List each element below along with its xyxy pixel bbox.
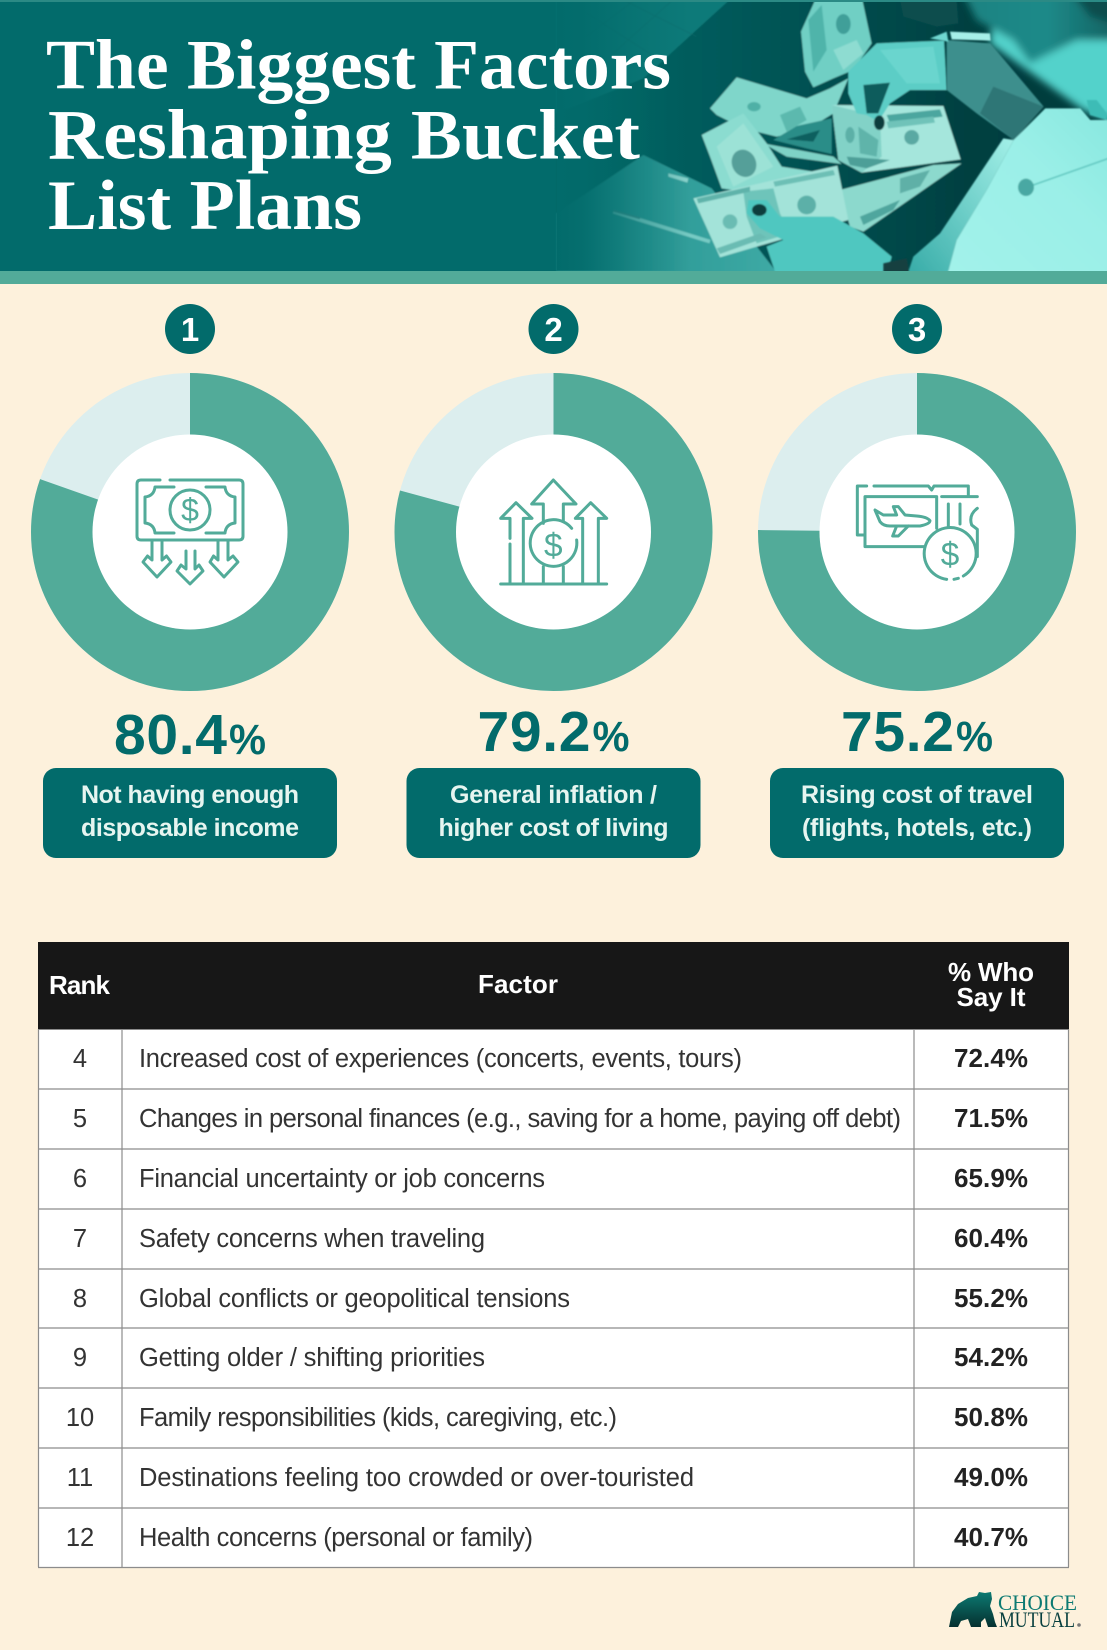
header photo: hands counting money [557, 0, 1107, 280]
icon: money bill with falling arrows: $ [181, 492, 199, 528]
header banner [0, 0, 1107, 284]
table header row: Rank [49, 970, 111, 1000]
table header row [38, 942, 1069, 1030]
donut chart 80.4% [31, 373, 349, 691]
label pill 2 [406, 768, 700, 858]
table body background [38, 1029, 1069, 1567]
percentage 75.2: % [956, 713, 993, 761]
panel: factor 1 [31, 304, 349, 858]
row rank 9 [73, 1342, 1028, 1372]
icon: rising arrows with dollar coin: $ [544, 528, 563, 565]
row rank 9: 9 [73, 1344, 87, 1372]
row rank 10 [66, 1402, 1028, 1432]
percentage 75.2: 75.2 [841, 700, 954, 764]
row rank 4: Increased cost of experiences (concerts, events, tours) [139, 1045, 742, 1073]
row rank 11: Destinations feeling too crowded or over-touristed [139, 1464, 694, 1492]
panel: factor 2 [394, 304, 712, 858]
row rank 6 [73, 1163, 1028, 1193]
row rank 5: 5 [73, 1105, 87, 1133]
label pill 3: Rising cost of travel [801, 781, 1033, 809]
rank badge 1: 1 [181, 311, 199, 348]
label pill 1: Not having enough [81, 781, 299, 809]
icon: rising arrows with dollar coin [501, 480, 607, 584]
row rank 11: 49.0% [954, 1462, 1028, 1492]
title [46, 26, 671, 245]
row rank 7 [73, 1223, 1028, 1253]
rank badge 1 [165, 304, 215, 354]
label pill 1: disposable income [81, 814, 299, 842]
row rank 4: 4 [73, 1045, 87, 1073]
row rank 7: 7 [73, 1225, 87, 1253]
row rank 9: Getting older / shifting priorities [139, 1344, 485, 1372]
label pill 3: (flights, hotels, etc.) [802, 814, 1032, 842]
table header row: Factor [478, 969, 558, 999]
title: List Plans [48, 167, 362, 245]
rank badge 2 [528, 304, 578, 354]
label pill 1 [43, 768, 337, 858]
table header row: Say It [956, 982, 1026, 1012]
percentage 79.2: % [592, 713, 630, 761]
percentage 80.4: 80.4 [114, 703, 227, 767]
logo: Choice Mutual [949, 1590, 1081, 1632]
green band under header [0, 271, 1107, 284]
donut chart 79.2% [394, 373, 712, 691]
logo: Choice Mutual: CHOICE [998, 1590, 1077, 1615]
row rank 10: 10 [66, 1404, 94, 1432]
title: The Biggest Factors [46, 26, 671, 104]
label pill 2: General inflation / [450, 781, 657, 809]
panel: factor 3 [758, 304, 1076, 858]
row rank 7: 60.4% [954, 1223, 1028, 1253]
rank badge 2: 2 [544, 311, 563, 348]
percentage 79.2: 79.2 [478, 700, 590, 764]
rank badge 3 [892, 304, 942, 354]
title: Reshaping Bucket [48, 96, 640, 174]
row rank 7: Safety concerns when traveling [139, 1225, 485, 1253]
row rank 8: 8 [73, 1285, 87, 1313]
row rank 8: Global conflicts or geopolitical tensions [139, 1285, 570, 1313]
row rank 10: Family responsibilities (kids, caregiving, etc.) [139, 1404, 617, 1432]
row rank 4: 72.4% [954, 1043, 1028, 1073]
label pill 3 [770, 768, 1064, 858]
label pill 2: higher cost of living [438, 814, 668, 842]
row rank 12 [66, 1522, 1028, 1552]
donut chart 75.2% [758, 373, 1076, 691]
row rank 8: 55.2% [954, 1283, 1028, 1313]
row rank 4 [73, 1043, 1028, 1073]
table: remaining factors [38, 942, 1069, 1568]
row rank 5: 71.5% [954, 1103, 1028, 1133]
percentage 80.4: % [229, 716, 266, 764]
icon: bear [949, 1592, 997, 1627]
row rank 6: 65.9% [954, 1163, 1028, 1193]
row rank 12: 12 [66, 1524, 94, 1552]
row rank 12: Health concerns (personal or family) [139, 1524, 533, 1552]
row rank 6: 6 [73, 1165, 87, 1193]
table header row: % Who [948, 957, 1034, 987]
row rank 9: 54.2% [954, 1342, 1028, 1372]
row rank 11: 11 [67, 1464, 93, 1492]
rank badge 3: 3 [908, 311, 926, 348]
row rank 10: 50.8% [954, 1402, 1028, 1432]
row rank 11 [67, 1462, 1028, 1492]
icon: plane tickets with dollar coin [857, 486, 977, 579]
icon: money bill with falling arrows [137, 480, 243, 584]
row rank 12: 40.7% [954, 1522, 1028, 1552]
hair and neck, heavily blurred [963, 2, 1107, 120]
row rank 5: Changes in personal finances (e.g., saving for a home, paying off debt) [139, 1105, 901, 1133]
row rank 6: Financial uncertainty or job concerns [139, 1165, 545, 1193]
icon: plane tickets with dollar coin: $ [941, 537, 959, 574]
row rank 8 [73, 1283, 1028, 1313]
logo: Choice Mutual: MUTUAL [999, 1607, 1075, 1632]
